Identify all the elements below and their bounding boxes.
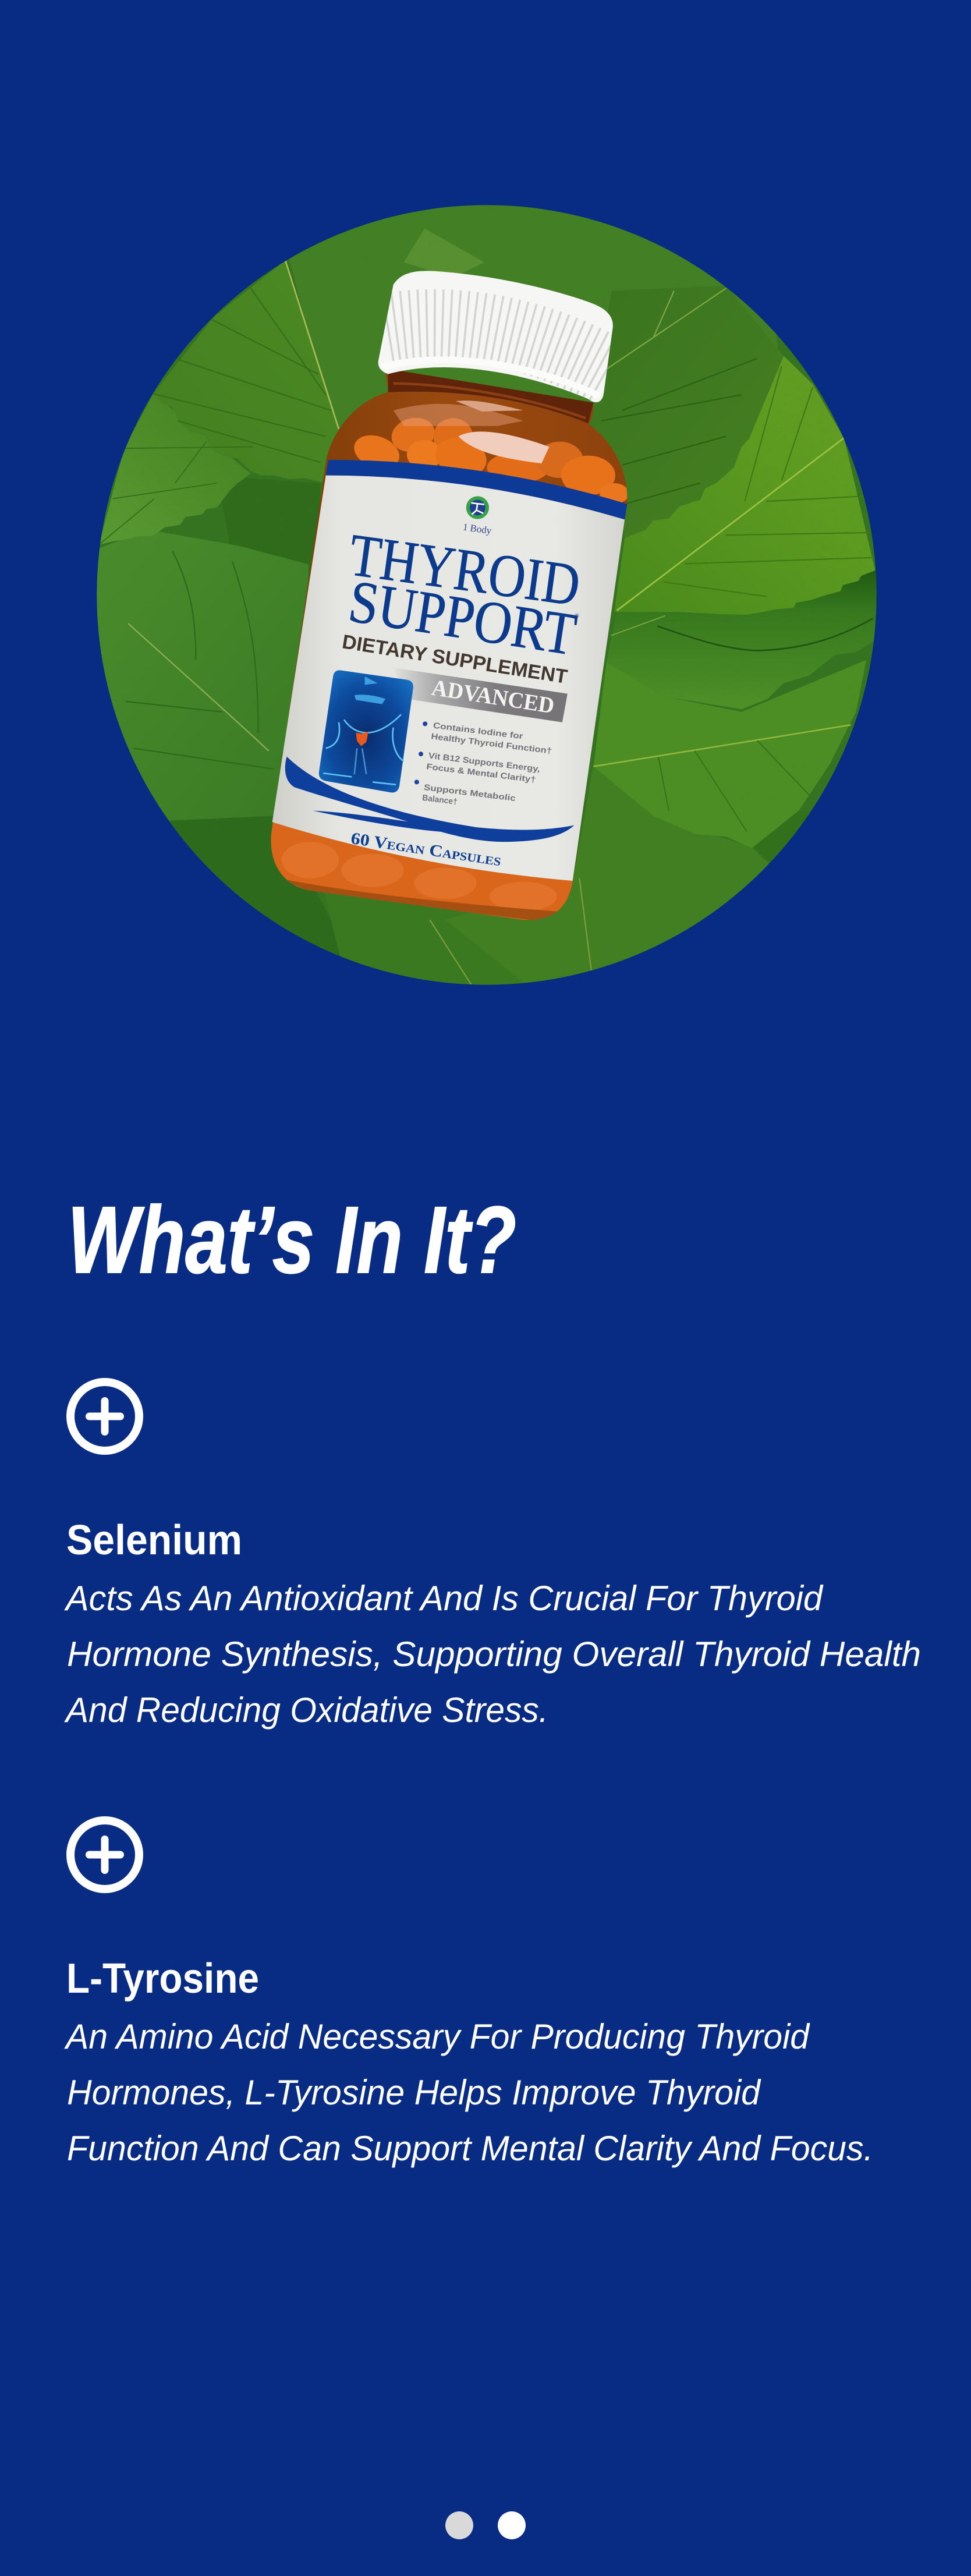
- photo: bottle on leaves: [81, 192, 896, 1007]
- heading: What’s In It?: [68, 1186, 516, 1293]
- label: [272, 476, 625, 881]
- description: L-Tyrosine: Hormones, L-Tyrosine Helps Improve Thyroid: [67, 2073, 761, 2112]
- brand logo: 1 Body: [462, 522, 492, 536]
- cap: [378, 271, 613, 402]
- benefit bullets: Balance†: [421, 793, 458, 807]
- glass jar: [253, 369, 629, 947]
- benefit bullets: Vit B12 Supports Energy,: [428, 751, 540, 774]
- icon: plus in circle: [70, 1382, 139, 1451]
- description: Selenium: And Reducing Oxidative Stress.: [64, 1691, 548, 1730]
- benefit bullets: Healthy Thyroid Function†: [431, 732, 552, 756]
- benefit bullets: Contains Iodine for: [433, 721, 524, 742]
- advanced band: [394, 668, 568, 722]
- blue band: [326, 460, 627, 519]
- description: L-Tyrosine: [64, 2017, 873, 2168]
- brand logo: [462, 496, 492, 536]
- benefit bullets: Supports Metabolic: [423, 783, 516, 803]
- product name: [345, 522, 584, 668]
- description: L-Tyrosine: Function And Can Support Mental Clarity And Focus.: [67, 2129, 873, 2168]
- name: Selenium: Selenium: [66, 1517, 242, 1564]
- product name: THYROID: [345, 522, 584, 619]
- pagination dots: [445, 2511, 526, 2539]
- product name: SUPPORT: [345, 568, 580, 668]
- name: L-Tyrosine: L-Tyrosine: [66, 1955, 259, 2002]
- leaves circle: [81, 192, 896, 1007]
- ingredient: Selenium: [64, 1382, 921, 1730]
- description: L-Tyrosine: An Amino Acid Necessary For Producing Thyroid: [64, 2017, 810, 2056]
- bottle: [253, 271, 629, 947]
- icon: plus in circle: [70, 1820, 139, 1889]
- subtitle: DIETARY SUPPLEMENT: [341, 630, 569, 688]
- advanced band: ADVANCED: [430, 675, 556, 718]
- benefit bullets: Focus & Mental Clarity†: [426, 762, 536, 785]
- description: Selenium: [64, 1579, 921, 1730]
- description: Selenium: Hormone Synthesis, Supporting Overall Thyroid Health: [67, 1635, 921, 1674]
- throat image: [319, 670, 413, 792]
- description: Selenium: Acts As An Antioxidant And Is Crucial For Thyroid: [64, 1579, 824, 1618]
- ingredient: L-Tyrosine: [64, 1820, 873, 2168]
- benefit bullets: [414, 721, 552, 807]
- product name: ®: [574, 612, 580, 619]
- swoosh: [285, 757, 574, 842]
- capsule count: 60 Vegan Capsules: [350, 830, 502, 870]
